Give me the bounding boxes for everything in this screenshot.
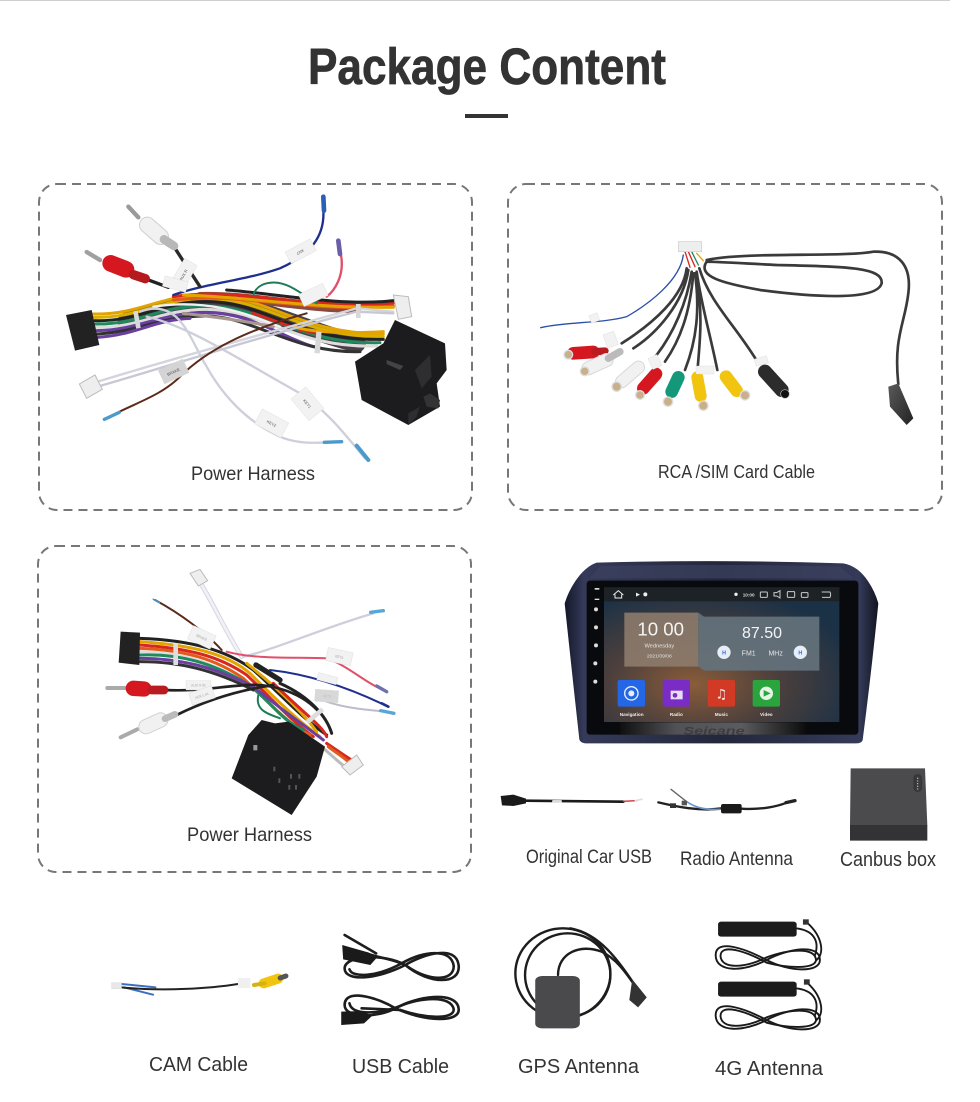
item: CAM cable: CAM Cable [149,1053,248,1076]
item: radio antenna: Radio Antenna [680,848,793,870]
panel: power harness 2 [38,546,471,872]
brand strip: Seicane [683,726,745,738]
wire tags: KEY1 [302,398,313,410]
stereo bezel [565,561,878,743]
right black ISO connector [355,320,447,425]
status bar [604,587,839,601]
wire tags [186,625,353,705]
cable ties [173,643,324,724]
radio card [698,613,819,671]
item: radio antenna [658,789,795,870]
item: USB cable: USB Cable [352,1055,449,1078]
quadlock connector [232,720,325,815]
radio card: FM1 [742,651,756,658]
wire tags: BRAKE [166,367,181,377]
radio card: 87.50 [742,625,782,642]
yellow RCA 1 [697,377,708,410]
item: 4G antenna: 4G Antenna [715,1057,824,1080]
SIM card end [888,383,913,425]
wire tags: AUX L IN [195,692,209,700]
wire tags: ANT [295,248,305,256]
clock card [624,613,698,667]
wire tags: KEY2 [266,419,278,428]
item: original car USB: Original Car USB [526,847,652,868]
wire tags: AUX R IN [191,684,206,688]
wire tags [158,239,328,438]
image: RCA and SIM cable [541,242,913,425]
app icon: video: Video [760,712,773,717]
white plug [393,295,412,319]
left black connector [66,310,99,351]
item: GPS antenna [515,928,647,1078]
small white connector [342,755,363,775]
red RCA plug [87,252,168,287]
small white connector [79,375,102,398]
wire tags: KEY1 [335,654,344,660]
green RCA [663,377,678,406]
connector pin details [253,745,300,790]
wire tags: AUX R [178,268,189,282]
radio card: H [722,650,726,656]
label: power harness 1: Power Harness [191,463,315,485]
red RCA plug [107,688,164,690]
item: canbus box [840,768,936,871]
panel: RCA / SIM card cable [508,184,942,510]
wire tags: KEY2 [322,694,331,699]
app icon: radio [663,680,690,717]
app icon: navigation: Navigation [620,712,644,717]
white header connector [678,242,702,252]
label: RCA SIM cable: RCA /SIM Card Cable [658,461,815,482]
panel: power harness 1 [39,184,472,510]
inner black frame [587,581,858,735]
radio card: H [798,650,802,656]
item: 4G antenna [715,919,824,1080]
white RCA plug [128,207,200,287]
bezel top highlight [590,565,853,578]
side buttons [593,588,599,684]
label: power harness 2: Power Harness [187,824,312,846]
image: power harness with quadlock connector [107,569,394,815]
item: CAM cable [112,976,286,1076]
yellow RCA 2 [726,377,750,400]
item: car stereo head unit [565,561,878,743]
white RCA 1 [580,352,620,376]
app icon: navigation [618,680,645,717]
wire tags: BRAKE [196,633,208,642]
red RCA 2 [636,374,656,399]
brand strip [620,722,807,738]
white RCA plug [121,714,175,737]
app icon: music: ♫ [715,688,727,703]
title underline [465,114,508,118]
app icon: video [753,680,780,717]
item: canbus box: Canbus box [840,849,936,871]
wire tags [589,313,768,374]
black audio jack [765,372,789,398]
clock card: 2021/09/08 [647,653,672,659]
left black connector [119,632,140,665]
status bar: 10:00 [743,592,755,597]
item: USB cable [341,935,459,1078]
item: GPS antenna: GPS Antenna [518,1055,640,1078]
image: power harness with RCA plugs and ISO connector [66,197,447,460]
clock card: Wednesday [644,643,674,649]
app icon: radio: Radio [670,712,683,717]
title: Package Content [308,38,666,95]
app icon: music: Music [715,712,728,717]
cable ties [133,304,361,354]
app icon: music [708,680,735,717]
white top connector [190,569,208,586]
radio card: MHz [768,651,783,658]
clock card: 10 00 [637,618,684,639]
item: original car USB [501,795,652,868]
red RCA 1 [564,350,605,359]
white RCA 2 [612,367,638,391]
screen [604,587,839,722]
